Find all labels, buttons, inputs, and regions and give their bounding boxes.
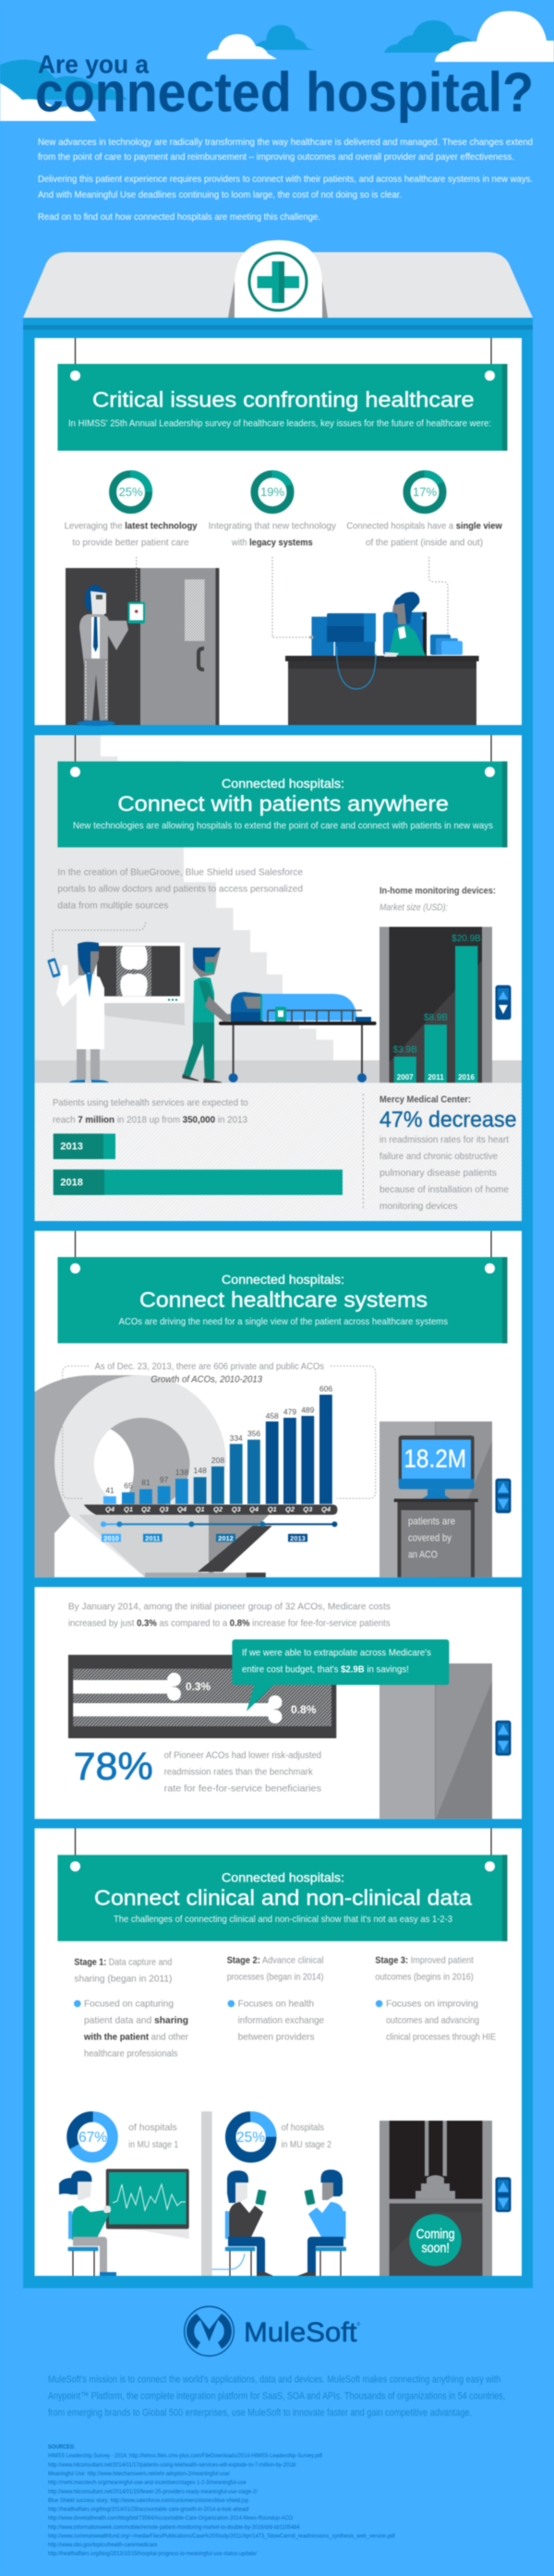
donut: 19%: 19% [260,485,284,499]
Mercy Medical Center stat: Mercy Medical Center: [379,1094,471,1106]
hospital roof [23,252,533,318]
illustration: x-ray monitor [95,943,185,1025]
bone x-ray bars [68,1655,336,1738]
donut: 25% of hospitals [231,2117,331,2158]
illustration: patient at ECG monitor [59,2169,189,2276]
axis tray and quarter labels: Q1 [124,1506,133,1514]
sources: http://healthaffairs.org/blog/2013/10/15/hospital-progress-to-meaningful-use-status-update/ [48,2552,257,2558]
elevator with monitor: 18.2M: covered by [408,1533,452,1544]
elevator chart: monitoring device market: 2011 [428,1073,444,1082]
BlueGroove text [57,867,303,911]
staircase background [35,735,333,1060]
sign: connect healthcare systems: Connect healthcare systems [139,1288,428,1312]
bone x-ray bars: 0.8% [291,1705,316,1716]
axis tray and quarter labels: Q2 [141,1506,151,1514]
issue captions: to provide better patient care [72,537,189,548]
bar: 2018: 2018 [60,1177,83,1188]
sign: connect healthcare systems: Connected hospitals: [222,1272,344,1287]
year timeline: 2010 [103,1534,119,1542]
title: Are you a [38,50,149,79]
elevator chart: monitoring device market: $8.9B [424,1012,448,1022]
stage 1 [74,1956,188,2060]
sources: http://healthaffairs.org/blog/2014/01/29/accountable-care-growth-in-2014-a-look-ahead/ [48,2507,249,2512]
bar value labels [105,1384,332,1495]
Mercy Medical Center stat: pulmonary disease patients [379,1167,497,1179]
year timeline [101,1521,337,1542]
issue captions [65,520,503,548]
elevator chart: monitoring device market: In-home monitoring devices: [379,885,496,896]
sources: HIMSS Leadership Survey - 2014: http://himss.files.cms-plus.com/FileDownloads/2014-HIMSS-Leadership-Survey.pdf [48,2454,322,2460]
BlueGroove text: In the creation of BlueGroove, Blue Shield used Salesforce [57,867,303,878]
Medicare text: increased by just 0.3% as compared to a 0.8% increase for fee-for-service patients [68,1618,391,1629]
stage 1: Stage 1: Data capture and [74,1956,173,1967]
intro text: And with Meaningful Use deadlines continuing to loom large, the cost of not doing so is clear. [38,189,402,200]
issue captions: Leveraging the latest technology [65,520,198,531]
bar value labels: 81 [141,1478,151,1487]
sign: clinical and non-clinical data: The challenges of connecting clinical and non-clinical show that it's not as easy as 1-2-3 [114,1914,452,1925]
stage 3: outcomes (begins in 2016) [375,1971,474,1982]
bar value labels: 606 [319,1384,332,1393]
stage 3: outcomes and advancing [386,2015,479,2026]
axis tray and quarter labels: Q4 [177,1506,187,1514]
illustration: woman with phone [212,2171,273,2276]
intro text: Read on to find out how connected hospitals are meeting this challenge. [38,212,320,223]
telehealth stat [53,1097,343,1195]
illustration: CT scanner [35,1375,272,1578]
MuleSoft logo: MuleSoft [244,2317,357,2348]
bar value labels: 138 [175,1468,188,1477]
elevator door [379,1663,492,1819]
callout: savings: If we were able to extrapolate across Medicare's [242,1647,431,1658]
chart heading [95,1361,324,1385]
axis tray and quarter labels: Q3 [232,1506,242,1514]
elevator: coming soon [379,2121,492,2276]
axis tray and quarter labels: Q3 [303,1506,313,1514]
bar value labels: 489 [301,1406,315,1415]
elevator chart: monitoring device market: 2007 [397,1073,414,1082]
telehealth stat: reach 7 million in 2018 up from 350,000 in 2013 [53,1114,247,1125]
donut: 25% of hospitals: in MU stage 2 [282,2139,331,2150]
intro text [38,137,533,223]
bar value labels: 97 [160,1475,169,1484]
elevator buttons [495,1479,512,1513]
bar value labels: 356 [247,1429,260,1438]
issue captions: with legacy systems [231,537,313,548]
elevator with monitor: 18.2M [379,1421,492,1578]
sign: connect with patients: Connect with patients anywhere [117,792,449,816]
building frame [23,318,533,2288]
donut: 25%: 25% [119,485,143,499]
stage 1: Focused on capturing [84,1999,174,2010]
elevator chart: monitoring device market: 2016 [458,1073,475,1082]
elevator: coming soon: soon! [421,2241,450,2256]
stat: 78%: 78% [74,1745,153,1788]
donut: 17% [406,474,443,510]
sources: http://www.cbo.gov/topics/health-care/medicare [48,2543,158,2548]
sign: critical issues [57,364,508,451]
sign: critical issues: Critical issues confronting healthcare [92,388,475,412]
axis tray and quarter labels: Q1 [196,1506,205,1514]
donut: 25% of hospitals: 25% [236,2130,265,2146]
sources: Meaningful Use: http://www.hitechanswers.net/ehr-adoption-2/meaningful-use/ [48,2472,230,2477]
stage 1: with the patient and other [83,2032,188,2043]
elevator with monitor: 18.2M: patients are [408,1517,455,1528]
stage 3: clinical processes through HIE [386,2032,496,2043]
sign: clinical and non-clinical data: Connected hospitals: [222,1869,344,1884]
stage 2 [227,1954,324,2043]
bar value labels: 41 [105,1486,114,1495]
stage 2: processes (began in 2014) [227,1971,323,1982]
axis tray and quarter labels: Q3 [160,1506,169,1514]
sources: http://mehi.masstech.org/meaningful-use-and-incentives/stages-1-2-3/meaningful-use [48,2481,247,2486]
elevator buttons [495,986,512,1020]
sign: connect with patients: Connected hospitals: [222,776,344,791]
donut: 25% [113,474,149,510]
sign: critical issues: In HIMSS' 25th Annual Leadership survey of healthcare leaders, key issues for the future of healthcare were: [68,418,491,429]
sign: connect with patients: New technologies are allowing hospitals to extend the point of care and connect with patients in new ways [73,820,493,831]
callout: savings [232,1639,449,1711]
axis tray and quarter labels: Q4 [105,1506,115,1514]
bar value labels: 208 [211,1456,224,1465]
panel: critical issues [35,338,522,726]
sources [48,2445,395,2558]
donut: 67% of hospitals: of hospitals [128,2122,177,2134]
Mercy Medical Center stat: failure and chronic obstructive [379,1151,498,1162]
bar chart: growth of ACOs [84,1384,337,1542]
stat: 78% [74,1745,321,1794]
Medicare text: By January 2014, among the initial pioneer group of 32 ACOs, Medicare costs [68,1602,391,1613]
panel: connect healthcare systems [35,1231,522,1578]
MuleSoft logo [185,2306,360,2356]
dotted callout frame [63,1366,376,1498]
issue captions: Connected hospitals have a single view [346,520,503,531]
hatched stats area [35,1082,522,1221]
axis tray and quarter labels: Q2 [213,1506,223,1514]
sources: http://www.informationweek.com/mobile/remote-patient-monitoring-market-to-double-by-2016/d/d-id/1105484 [48,2525,300,2531]
intro text: from the point of care to payment and reimbursement – improving outcomes and overall provider and payer effectiveness. [38,151,514,163]
company description [48,2374,505,2418]
stage 3: Focuses on improving [386,1999,478,2010]
bar value labels: 458 [266,1411,279,1421]
elevator with monitor: 18.2M: an ACO [408,1550,438,1561]
axis tray and quarter labels [84,1505,337,1515]
elevator chart: monitoring device market: $20.9B [452,934,481,944]
sources: http://www.commonwealthfund.org/~/media/Files/Publications/Case%20Study/2011/Apr/1473_SilowCarroll_readmissions_synthesis_web_version.pdf [48,2534,395,2540]
donut: 17%: 17% [413,485,437,499]
illustration: receptionist at desk [285,592,479,725]
sources: SOURCES: [48,2445,76,2450]
donut: 25% of hospitals: of hospitals [282,2122,324,2134]
bar: 2013: 2013 [60,1142,83,1153]
sources: Blue Shield success story: http://www.salesforce.com/customers/stories/blue-shield.jsp [48,2498,249,2504]
axis tray and quarter labels: Q4 [249,1506,259,1514]
floor [35,1060,522,1082]
illustration: doctor with phone [47,922,146,1082]
elevator chart: monitoring device market [379,885,496,1082]
axis tray and quarter labels: Q2 [285,1506,295,1514]
Mercy Medical Center stat: 47% decrease [379,1107,517,1132]
elevator chart: monitoring device market: $3.9B [393,1046,417,1056]
year timeline: 2011 [145,1534,160,1542]
stage 2: information exchange [238,2015,324,2026]
donut: 67% of hospitals [72,2117,178,2158]
stage 3 [375,1954,496,2043]
hanging cords [76,338,491,374]
axis tray and quarter labels: Q1 [268,1506,277,1514]
Medicare text [68,1602,391,1629]
sign: connect healthcare systems [57,1257,508,1343]
BlueGroove text: data from multiple sources [57,900,168,911]
axis tray and quarter labels: Q4 [321,1506,331,1514]
stat: 78%: readmission rates than the benchmark [164,1766,313,1777]
stage 1: healthcare professionals [84,2049,177,2060]
clouds [0,11,554,121]
stage 2: Stage 2: Advance clinical [227,1954,323,1965]
chart heading: As of Dec. 23, 2013, there are 606 private and public ACOs [95,1361,324,1373]
year timeline: 2013 [290,1534,306,1542]
stage 2: between providers [238,2032,315,2043]
BlueGroove text: portals to allow doctors and patients to access personalized [57,884,303,895]
bar: 2018 [54,1169,343,1195]
illustration: nurse and patient on gurney [183,948,377,1082]
panel: clinical and non-clinical data [35,1829,522,2276]
stage 1: sharing (began in 2011) [74,1973,172,1984]
bar value labels: 479 [283,1408,296,1417]
donut: 67% of hospitals: in MU stage 1 [128,2139,178,2150]
donut: 19% [255,474,290,510]
issue captions: Integrating that new technology [209,520,337,531]
Mercy Medical Center stat: in readmission rates for its heart [379,1134,509,1145]
stage 3: Stage 3: Improved patient [375,1954,474,1965]
bar value labels: 148 [194,1466,207,1475]
stat: 78%: rate for fee-for-service beneficiaries [164,1783,321,1794]
bar value labels: 334 [230,1433,243,1443]
telehealth stat: Patients using telehealth services are expected to [53,1097,248,1108]
illustration: man with phone [297,2170,346,2276]
Mercy Medical Center stat [379,1094,517,1212]
donut: 67% of hospitals: 67% [78,2130,107,2146]
elevator: coming soon: Coming [416,2227,454,2242]
illustration: doctor at door with tablet [66,557,448,726]
bar value labels: 65 [124,1482,133,1491]
panel: connect with patients [35,735,522,1221]
year timeline: 2012 [218,1534,234,1542]
hospital sign with cross [228,240,328,318]
chart heading: Growth of ACOs, 2010-2013 [151,1375,262,1385]
sign: connect with patients [57,761,508,847]
sources: http://www.hitconsultant.net/2014/01/17/patients-using-telehealth-services-will-explode-to-7-million-by-2018/ [48,2462,296,2468]
elevator buttons [495,2177,512,2212]
sign: connect healthcare systems: ACOs are driving the need for a single view of the patient across healthcare systems [119,1316,448,1327]
elevator buttons [495,1721,512,1756]
callout: savings: entire cost budget, that's $2.9B in savings! [242,1663,409,1675]
MuleSoft logo: ® [356,2321,360,2328]
Mercy Medical Center stat: because of installation of home [379,1184,509,1195]
stage 1: patient data and sharing [84,2015,188,2026]
bone x-ray bars: 0.3% [186,1682,211,1693]
elevator with monitor: 18.2M: 18.2M [403,1444,466,1472]
stage 2: Focuses on health [238,1999,314,2010]
sources: http://www.hitconsultant.net/2014/01/15/fewer-25-providers-ready-meaningful-use-stage-2/ [48,2489,258,2495]
bar: 2013 [54,1133,115,1159]
elevator chart: monitoring device market: Market size (USD): [379,901,448,913]
sign: clinical and non-clinical data [57,1855,508,1941]
divider column [201,2111,212,2276]
sign: clinical and non-clinical data: Connect clinical and non-clinical data [94,1885,473,1909]
issue captions: of the patient (inside and out) [366,537,483,548]
Mercy Medical Center stat: monitoring devices [379,1201,458,1212]
company description: from emerging brands to Global 500 enterprises, use MuleSoft to innovate faster and gain competitive advantage. [48,2407,472,2418]
stat: 78%: of Pioneer ACOs had lower risk-adjusted [164,1749,321,1760]
panel: Medicare costs [35,1587,522,1819]
sources: http://www.dovetailhealth.com/blog/bid/73564/Accountable-Care-Organization-2014-News-Roundup-ACO [48,2516,293,2522]
